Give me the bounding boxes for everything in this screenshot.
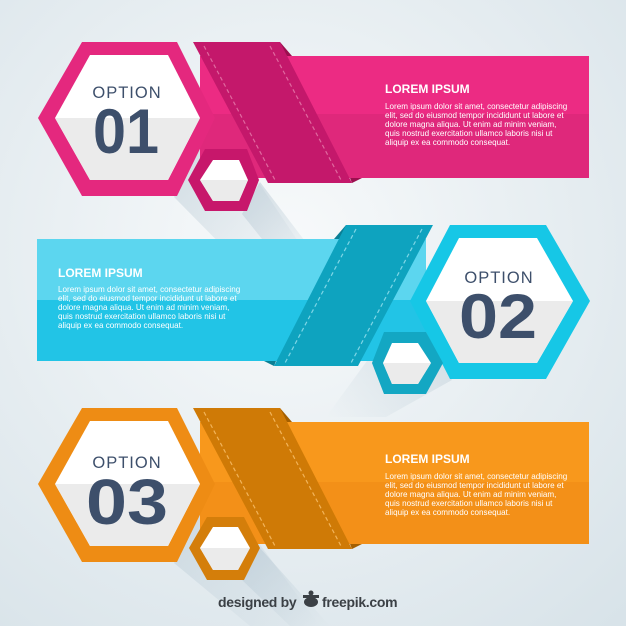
text block [58,266,240,330]
ribbon strip [264,225,433,366]
option label: OPTION [464,269,534,287]
text block: aliquip ex ea commodo consequat. [385,138,510,147]
text block [385,82,567,147]
text block: aliquip ex ea commodo consequat. [58,321,183,330]
footer credit: designed by [218,594,297,610]
text block: quis nostrud exercitation ullamco laboris nisi ut [58,312,226,321]
panel: option 03 [38,408,589,626]
icon: freepik logo [303,590,319,607]
text block: LOREM IPSUM [58,266,143,280]
text block: quis nostrud exercitation ullamco laboris nisi ut [385,129,553,138]
option label: OPTION [92,84,162,102]
text block: LOREM IPSUM [385,82,470,96]
text block: elit, sed do eiusmod tempor incididunt ut labore et [58,294,237,303]
footer credit: freepik.com [322,594,397,610]
panel: option 03: 03 [86,466,168,538]
text block [385,452,567,517]
text block: elit, sed do eiusmod tempor incididunt ut labore et [385,111,564,120]
text block: Lorem ipsum dolor sit amet, consectetur adipiscing [385,102,567,111]
small hexagon [372,332,443,394]
text block: dolore magna aliqua. Ut enim ad minim veniam, [385,120,556,129]
panel: option 02 [37,225,590,417]
band [200,422,589,544]
big hexagon [38,42,215,196]
panel: option 02: 02 [459,282,537,352]
text block: Lorem ipsum dolor sit amet, consectetur adipiscing [58,285,240,294]
text block: Lorem ipsum dolor sit amet, consectetur adipiscing [385,472,567,481]
text block: elit, sed do eiusmod tempor incididunt ut labore et [385,481,564,490]
small hexagon [189,517,260,580]
text block: aliquip ex ea commodo consequat. [385,508,510,517]
ribbon strip [193,408,362,549]
text block: dolore magna aliqua. Ut enim ad minim veniam, [385,490,556,499]
option label: OPTION [92,454,162,472]
text block: quis nostrud exercitation ullamco laboris nisi ut [385,499,553,508]
text block: dolore magna aliqua. Ut enim ad minim veniam, [58,303,229,312]
panel: option 01 [38,42,589,274]
big hexagon [410,225,590,379]
big hexagon [38,408,215,562]
band [37,239,426,361]
small hexagon [188,149,259,211]
text block: LOREM IPSUM [385,452,470,466]
band [200,56,589,178]
panel: option 01: 01 [93,97,159,167]
footer credit [218,590,397,610]
ribbon strip [193,42,362,183]
